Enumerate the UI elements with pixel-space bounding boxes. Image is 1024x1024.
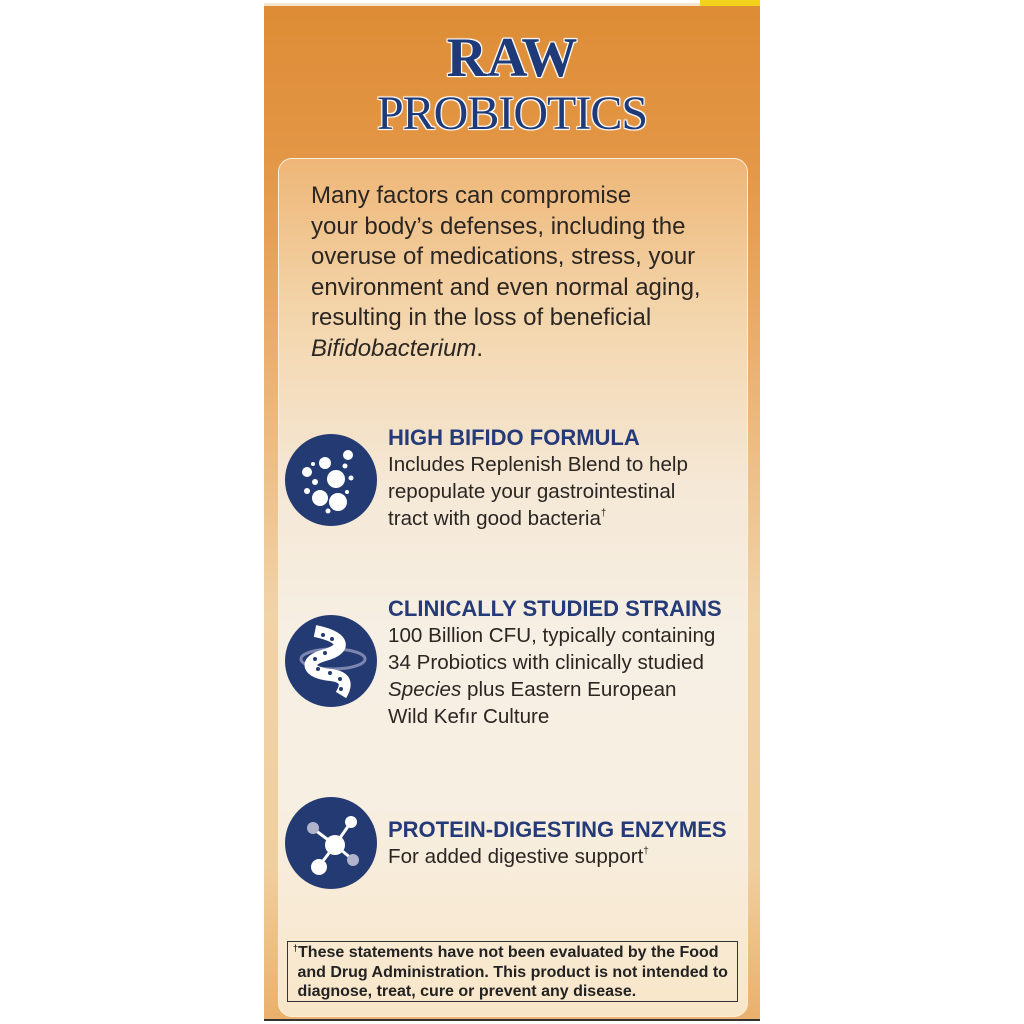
disclaimer box (287, 941, 738, 1002)
item: high bifido: Includes Replenish Blend to help (388, 453, 688, 476)
icon: intestine (285, 615, 377, 707)
intro paragraph: environment and even normal aging, (311, 274, 701, 300)
item: high bifido: repopulate your gastrointestinal (388, 480, 675, 503)
item: enzymes (388, 817, 727, 868)
title: RAW: RAW (447, 27, 577, 89)
icon: molecule (285, 797, 377, 889)
item: clinically studied strains: Wild Kefır Culture (388, 705, 549, 728)
item: high bifido (388, 425, 688, 530)
intro paragraph: Bifidobacterium. (311, 334, 483, 362)
intro paragraph: Many factors can compromise (311, 182, 631, 209)
item: clinically studied strains: CLINICALLY STUDIED STRAINS (388, 596, 722, 621)
item: enzymes: PROTEIN-DIGESTING ENZYMES (388, 817, 727, 842)
yellow corner strip (700, 0, 760, 6)
icon: bubbles (285, 434, 377, 526)
content panel (278, 158, 748, 1017)
intro paragraph: your body’s defenses, including the (311, 212, 685, 240)
title: PROBIOTICS: PROBIOTICS (377, 87, 647, 140)
product box background (264, 3, 760, 1021)
item: enzymes: For added digestive support† (388, 845, 649, 868)
disclaimer box: and Drug Administration. This product is not intended to (297, 964, 728, 980)
disclaimer box: diagnose, treat, cure or prevent any disease. (297, 983, 636, 1000)
item: high bifido: HIGH BIFIDO FORMULA (388, 425, 640, 450)
intro paragraph: resulting in the loss of beneficial (311, 304, 651, 331)
item: clinically studied strains (388, 596, 722, 728)
intro paragraph (311, 182, 701, 362)
item: high bifido: tract with good bacteria† (388, 507, 606, 530)
intro paragraph: overuse of medications, stress, your (311, 243, 695, 270)
item: clinically studied strains: 100 Billion CFU, typically containing (388, 624, 715, 647)
item: clinically studied strains: 34 Probiotics with clinically studied (388, 651, 704, 674)
item: clinically studied strains: Species plus Eastern European (388, 678, 676, 701)
disclaimer box: †These statements have not been evaluated by the Food (293, 943, 719, 961)
